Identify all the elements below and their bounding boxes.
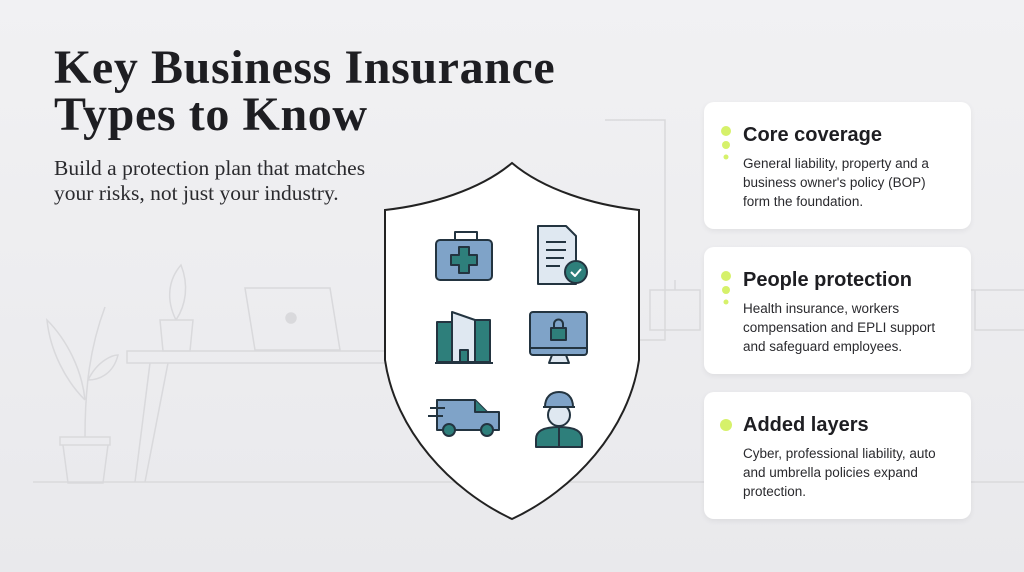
- icon: monitor lock: [530, 312, 587, 363]
- subtitle: your risks, not just your industry.: [54, 181, 339, 205]
- card: added layers: Cyber, professional liability, auto and umbrella policies expand protection.: [743, 446, 936, 499]
- dots: [721, 126, 731, 160]
- card: added layers: [704, 392, 971, 519]
- icon: document check: [538, 226, 587, 284]
- card: people protection: Health insurance, workers compensation and EPLI support and safeguard employees.: [743, 301, 935, 354]
- card: people protection: [704, 247, 971, 374]
- card: core coverage: Core coverage: [743, 124, 882, 146]
- shield with icons: [384, 162, 640, 520]
- subtitle: Build a protection plan that matches: [54, 156, 365, 180]
- subtitle: [54, 156, 365, 205]
- dot: [720, 419, 732, 431]
- card: people protection: People protection: [743, 269, 912, 291]
- icon: building: [435, 312, 493, 363]
- title: Key Business Insurance: [54, 41, 555, 94]
- icon: worker: [536, 392, 582, 447]
- icon: medical kit: [436, 232, 492, 280]
- card: core coverage: General liability, property and a business owner's policy (BOP) form the foundation.: [743, 156, 929, 209]
- card: core coverage: [704, 102, 971, 229]
- dots: [721, 271, 731, 304]
- card: added layers: Added layers: [743, 414, 869, 436]
- title: Types to Know: [54, 88, 368, 141]
- icon: delivery van: [428, 400, 499, 436]
- title: [54, 41, 555, 141]
